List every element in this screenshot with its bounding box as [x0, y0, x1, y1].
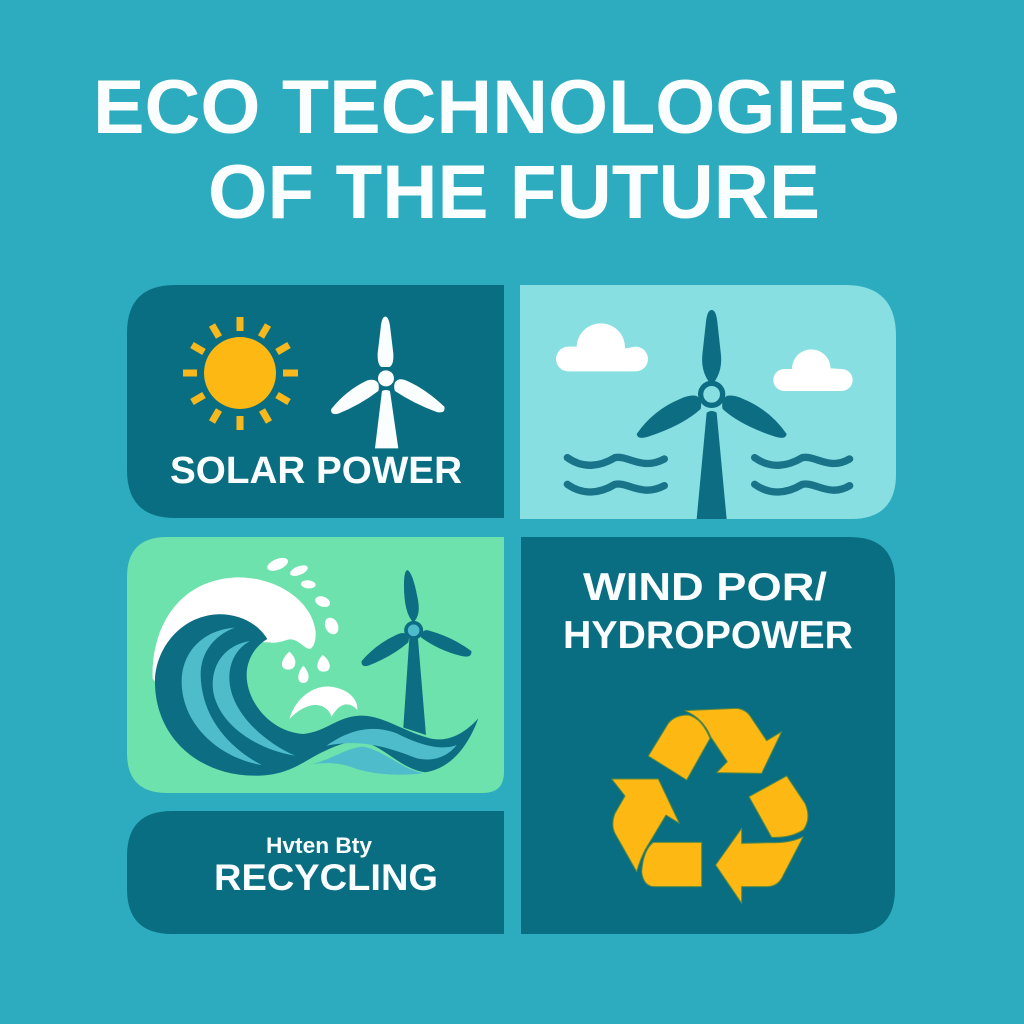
icon: small cloud — [773, 349, 853, 391]
spray drops — [265, 555, 341, 683]
lower foam band — [307, 747, 423, 775]
icon: sun — [183, 317, 298, 430]
icon: waves — [567, 457, 850, 492]
icon: clouds and offshore wind turbine — [556, 310, 853, 519]
label: wind and hydropower: WIND POR/ — [583, 566, 827, 609]
small caption: Hvten Bty — [266, 833, 373, 858]
wave stripes — [182, 628, 262, 765]
title: OF THE FUTURE — [208, 150, 820, 235]
foam — [289, 686, 357, 719]
wave crest — [153, 577, 316, 682]
panel: wave energy — [127, 537, 504, 793]
panel: wind and hydropower — [521, 537, 895, 934]
label: recycling: RECYCLING — [214, 857, 438, 898]
title — [93, 65, 900, 235]
panel: solar power — [127, 285, 504, 518]
icon: large cloud — [556, 323, 648, 371]
wave turbine — [362, 570, 471, 735]
wave body — [155, 614, 478, 776]
label: solar power: SOLAR POWER — [170, 450, 462, 492]
icon: white wind turbine — [331, 317, 445, 448]
icon: offshore wind turbine — [637, 310, 787, 519]
label: wind and hydropower: HYDROPOWER — [563, 614, 853, 657]
panel: offshore wind — [520, 285, 896, 519]
title: ECO TECHNOLOGIES — [93, 65, 900, 150]
label: wind and hydropower — [563, 566, 853, 657]
icon: recycling symbol — [612, 708, 808, 903]
panel: recycling label — [127, 811, 504, 934]
icon: ocean wave and turbine — [153, 555, 478, 776]
